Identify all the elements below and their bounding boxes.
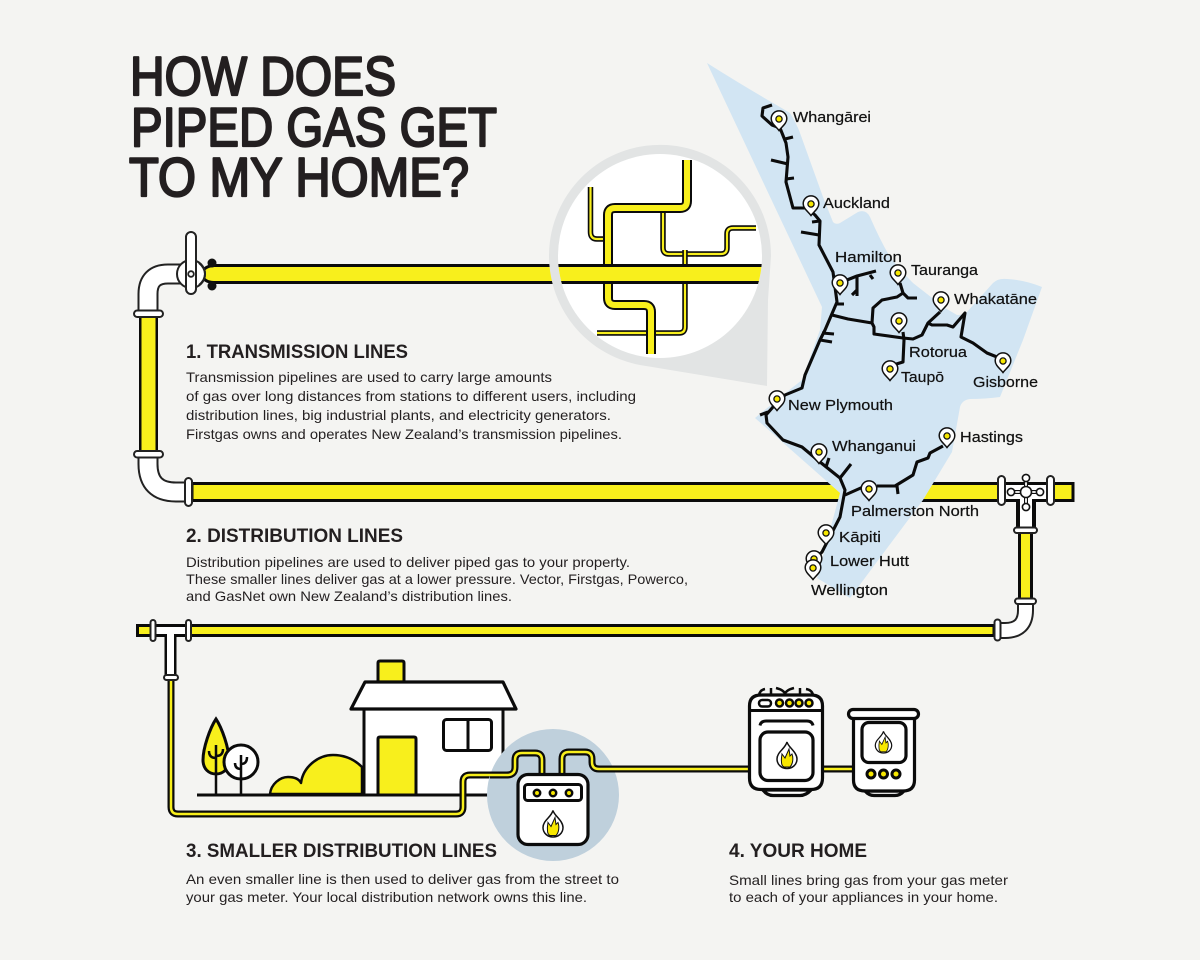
T flanges bbox=[150, 620, 191, 680]
meter display bbox=[524, 784, 582, 800]
T body bbox=[153, 624, 189, 677]
city labels: Rotorua bbox=[909, 345, 968, 361]
section 2: distribution lines: These smaller lines deliver gas at a lower pressure. Vector, Firstgas, Powerco, bbox=[186, 571, 688, 587]
section 2: distribution lines: 2. DISTRIBUTION LINES bbox=[186, 525, 403, 547]
chimney bbox=[378, 661, 404, 683]
heater body bbox=[854, 717, 914, 791]
city labels: Whanganui bbox=[832, 439, 916, 455]
left T junction and service line bbox=[150, 620, 542, 814]
city labels: Hastings bbox=[960, 430, 1023, 446]
street pipe bbox=[138, 620, 1000, 640]
city labels: Taupō bbox=[901, 370, 944, 386]
service line to house bbox=[171, 678, 542, 814]
gas network lines bbox=[760, 105, 997, 560]
elbow flange bbox=[994, 620, 1000, 640]
heater window bbox=[862, 722, 906, 762]
service lines over meter circle and to appliances bbox=[490, 752, 855, 776]
section 1: transmission lines: Firstgas owns and operates New Zealand’s transmission pipelines. bbox=[186, 426, 622, 442]
yellow tree bbox=[203, 719, 229, 795]
bush bbox=[270, 755, 362, 794]
oven controls bbox=[759, 700, 812, 706]
section 1: transmission lines bbox=[186, 341, 636, 442]
section 3: smaller distribution lines: your gas meter. Your local distribution network owns this line. bbox=[186, 889, 587, 905]
network detail inside lens bbox=[558, 160, 762, 354]
title: HOW DOES bbox=[130, 45, 396, 107]
right T junction and descending pipe bbox=[997, 474, 1054, 630]
heater foot bbox=[865, 791, 904, 796]
city labels: Gisborne bbox=[973, 375, 1038, 391]
city labels: Wellington bbox=[811, 583, 888, 599]
white round tree bbox=[224, 745, 258, 795]
T junction body bbox=[1001, 482, 1051, 530]
section 3: smaller distribution lines: 3. SMALLER DISTRIBUTION LINES bbox=[186, 840, 497, 862]
city labels: Whangārei bbox=[793, 110, 871, 126]
map of North Island bbox=[707, 63, 1042, 598]
oven body bbox=[750, 695, 822, 790]
cross valve handle bbox=[1007, 474, 1044, 511]
city labels: Palmerston North bbox=[851, 504, 979, 520]
icon: flame bbox=[543, 810, 563, 837]
door bbox=[378, 737, 416, 795]
city labels: Hamilton bbox=[835, 250, 902, 266]
section 4: your home: to each of your appliances in your home. bbox=[729, 889, 998, 905]
transmission pipe with valve and elbows bbox=[134, 232, 700, 492]
roof bbox=[351, 682, 516, 709]
gas oven bbox=[750, 688, 823, 796]
oven feet bbox=[763, 790, 811, 796]
title: TO MY HOME? bbox=[129, 146, 469, 208]
magnifier bbox=[540, 145, 771, 386]
section 4: your home: Small lines bring gas from your gas meter bbox=[729, 872, 1008, 888]
section 3: smaller distribution lines: An even smaller line is then used to deliver gas from the street to bbox=[186, 871, 619, 887]
section 1: transmission lines: of gas over long distances from stations to different users, including bbox=[186, 388, 636, 404]
meter circle backdrop bbox=[487, 729, 619, 861]
meter dials bbox=[534, 790, 572, 796]
heater dials bbox=[867, 770, 900, 778]
section 3: smaller distribution lines bbox=[186, 840, 619, 905]
title bbox=[129, 45, 497, 208]
city labels: New Plymouth bbox=[788, 398, 893, 414]
heater top bbox=[848, 710, 918, 718]
gas meter bbox=[518, 774, 588, 844]
oven window bbox=[760, 732, 813, 780]
section 2: distribution lines: Distribution pipelines are used to deliver piped gas to your property. bbox=[186, 554, 630, 570]
house scene bbox=[197, 661, 516, 795]
section 2: distribution lines bbox=[186, 525, 688, 604]
top yellow pipe bbox=[201, 266, 700, 282]
section 1: transmission lines: Transmission pipelines are used to carry large amounts bbox=[186, 369, 552, 385]
section 2: distribution lines: and GasNet own New Zealand’s distribution lines. bbox=[186, 588, 512, 604]
valve bolts bbox=[208, 258, 216, 290]
lower right elbow bbox=[997, 601, 1026, 630]
city labels: Auckland bbox=[823, 196, 890, 212]
title: PIPED GAS GET bbox=[131, 96, 497, 158]
city labels: Whakatāne bbox=[954, 292, 1037, 308]
gas heater bbox=[848, 710, 918, 796]
burners bbox=[759, 688, 813, 695]
city labels: Lower Hutt bbox=[830, 554, 909, 570]
city labels: Kāpiti bbox=[839, 530, 881, 546]
icon: flame bbox=[777, 742, 797, 768]
city labels: Tauranga bbox=[911, 263, 979, 279]
T flanges bbox=[998, 476, 1054, 505]
location pins bbox=[769, 111, 1011, 580]
oven handle bbox=[760, 721, 813, 726]
section 4: your home: 4. YOUR HOME bbox=[729, 840, 867, 862]
house body bbox=[364, 708, 503, 795]
pipe flanges bbox=[134, 310, 163, 458]
city labels bbox=[788, 110, 1038, 599]
top left white elbow bbox=[148, 274, 182, 314]
vertical yellow section bbox=[1018, 532, 1033, 600]
magnifier ring and pointer bbox=[549, 145, 771, 386]
section 4: your home bbox=[729, 840, 1008, 905]
window bbox=[444, 720, 492, 750]
distribution pipe across map bbox=[185, 478, 1073, 506]
section 1: transmission lines: distribution lines, big industrial plants, and electricity generators. bbox=[186, 407, 611, 423]
valve bbox=[177, 232, 205, 294]
bottom left white elbow bbox=[148, 454, 190, 492]
ground line bbox=[197, 794, 490, 796]
vertical yellow section bbox=[139, 316, 158, 452]
icon: flame bbox=[875, 731, 892, 753]
section 1: transmission lines: 1. TRANSMISSION LINES bbox=[186, 341, 408, 363]
